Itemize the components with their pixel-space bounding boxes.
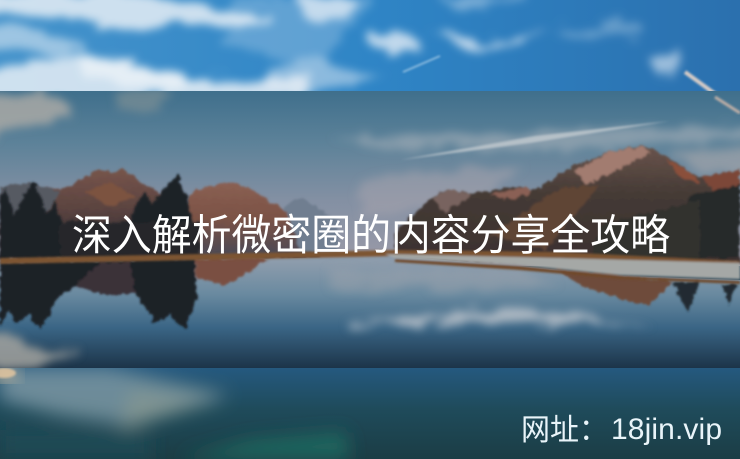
website footer: 18jin.vip xyxy=(611,413,722,446)
mountains left xyxy=(0,145,740,262)
photo: bright blue sky with clouds xyxy=(0,0,740,91)
website footer: 网址： xyxy=(521,414,608,447)
reflection left xyxy=(0,258,268,330)
shoreline xyxy=(0,250,740,284)
title: 深入解析微密圈的内容分享全攻略 xyxy=(72,212,670,260)
reflection right xyxy=(555,268,738,312)
mountains right xyxy=(395,145,740,262)
website footer xyxy=(521,413,722,447)
tree line left xyxy=(0,175,200,258)
translucent dark title band xyxy=(0,90,740,368)
band clouds xyxy=(0,90,740,218)
lower water strip xyxy=(0,368,740,459)
water xyxy=(0,256,740,368)
